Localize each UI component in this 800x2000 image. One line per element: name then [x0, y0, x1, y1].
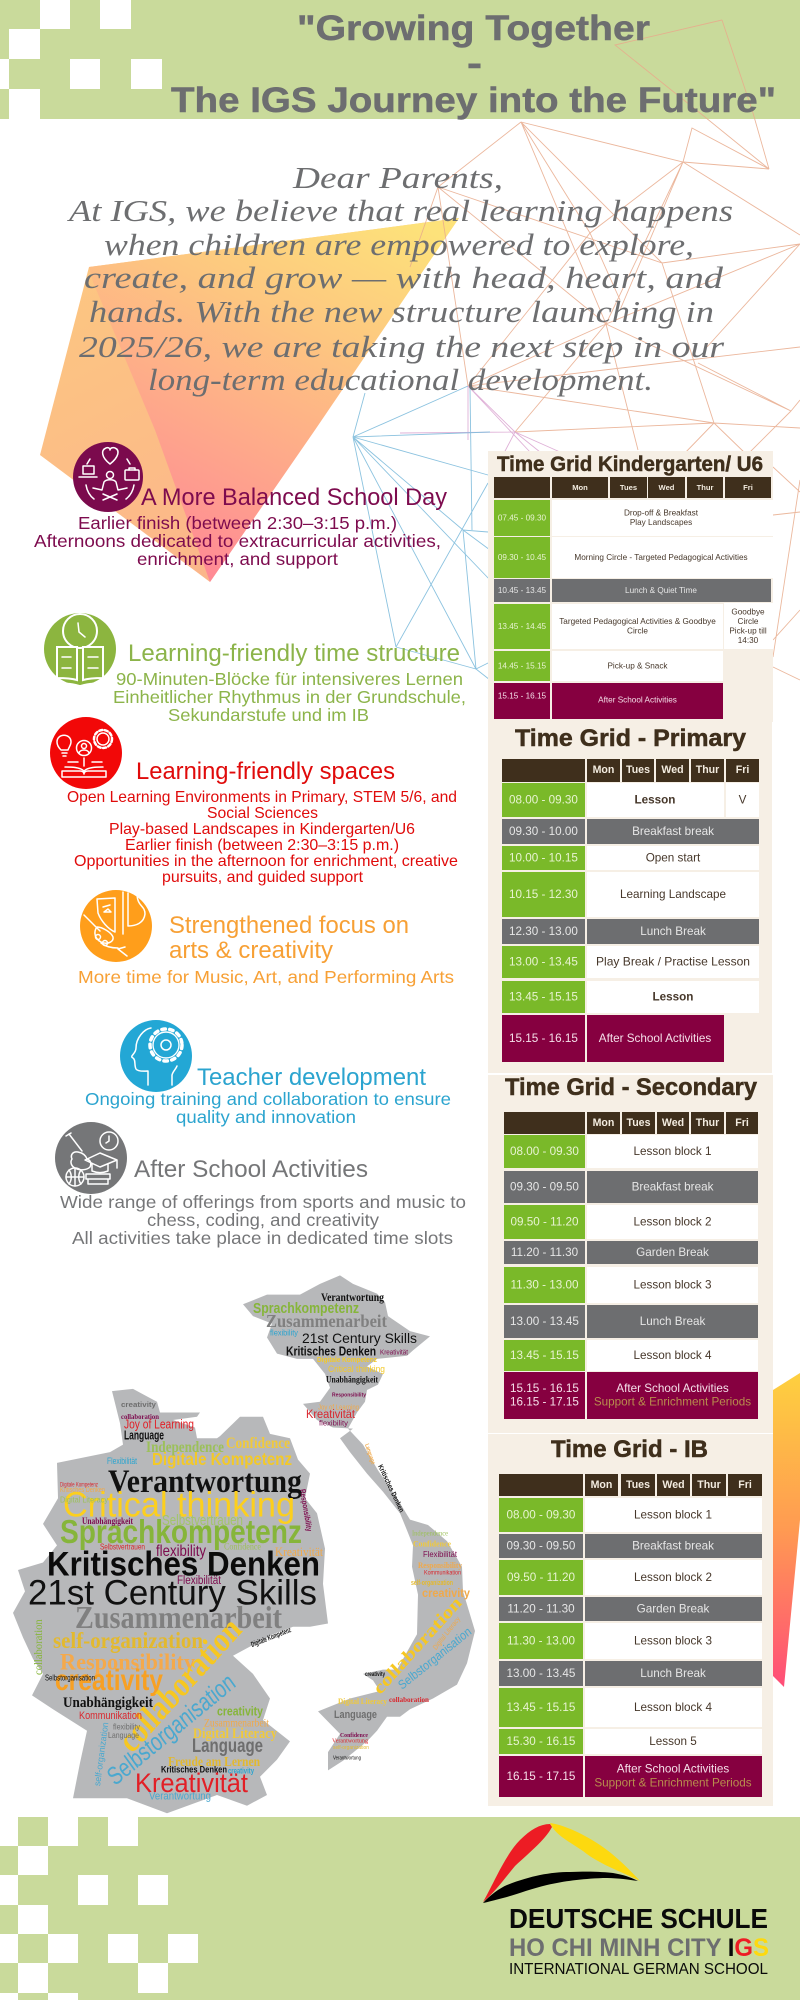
row morning circle: 09.30 - 10.45 [498, 553, 547, 562]
row after school: 15.15 - 16.15 [510, 1382, 579, 1395]
word cloud texts: Digitale Kompetenz [250, 1625, 292, 1649]
word cloud texts: Digitale Kompetenz [60, 1481, 98, 1488]
letter to parents: long-term educational development. [148, 362, 653, 397]
row lesson block 4 [499, 1688, 762, 1727]
word cloud texts: creativity [121, 1400, 156, 1409]
letter to parents: At IGS, we believe that real learning happens [67, 193, 733, 228]
section: teacher development [85, 1020, 451, 1127]
word cloud texts: Unabhängigkeit [63, 1695, 153, 1711]
word cloud texts: collaboration [112, 1610, 249, 1760]
header row: Mon [593, 764, 614, 776]
row lesson block 3: 11.30 - 13.00 [510, 1278, 579, 1292]
letter to parents [67, 160, 733, 397]
row garden break [504, 1241, 758, 1264]
word cloud texts: self-organization [411, 1578, 453, 1587]
row lesson block 2: Lesson block 2 [634, 1216, 711, 1228]
word cloud texts: Digital Literacy [60, 1494, 109, 1505]
word cloud texts: Flexibilität [177, 1575, 222, 1587]
panel: time grid kindergarten [488, 451, 773, 722]
body text: pursuits, and guided support [162, 869, 364, 886]
row targeted activities: 14:30 [738, 636, 759, 645]
row after school: After School Activities [599, 1032, 711, 1045]
heading: After School Activities [134, 1156, 368, 1183]
word cloud texts: Selbstvertrauen [162, 1513, 243, 1529]
row open start [502, 846, 759, 870]
row pick-up: Pick-up & Snack [607, 662, 668, 670]
letter to parents: Dear Parents, [292, 160, 503, 195]
row lunch: Lunch Break [640, 925, 706, 938]
word cloud texts: Zusammenarbeit [266, 1310, 387, 1331]
row lesson afternoon: 13.45 - 15.15 [509, 990, 578, 1004]
row lesson block 4: 13.45 - 15.15 [510, 1349, 579, 1362]
row lesson block 4: Lesson block 4 [634, 1349, 712, 1362]
word cloud texts: collaboration [389, 1696, 429, 1704]
row lesson block 1 [504, 1135, 758, 1168]
row breakfast: Breakfast break [632, 1180, 714, 1194]
header row: Thur [697, 1479, 721, 1491]
body text: quality and innovation [176, 1107, 356, 1127]
logo text [509, 1903, 769, 1978]
body text: enrichment, and support [137, 549, 338, 569]
row lesson block 2 [499, 1560, 762, 1595]
word cloud texts: Selbstorganisation [102, 1668, 241, 1791]
body text: Afternoons dedicated to extracurricular activities, [34, 531, 441, 551]
row pick-up [494, 651, 723, 681]
body text [85, 1089, 451, 1127]
row lesson block 3: Lesson block 3 [634, 1278, 711, 1292]
row open start: 10.00 - 10.15 [509, 852, 578, 864]
header row [499, 1474, 762, 1496]
header row: Wed [659, 483, 675, 492]
body text [34, 513, 441, 569]
heading: Learning-friendly spaces [136, 758, 395, 785]
icon: mask, palette, violin [80, 890, 152, 962]
word cloud texts: 21st Century Skills [28, 1573, 317, 1613]
section: arts and creativity [78, 890, 454, 987]
header row: Tues [620, 483, 637, 492]
word cloud texts: Language [108, 1730, 139, 1740]
decorative gradient polygon right [773, 1373, 800, 1687]
word cloud texts: Responsibility [332, 1392, 367, 1398]
word cloud texts [253, 1292, 474, 1762]
row lesson: V [739, 794, 747, 806]
row open start: Open start [646, 852, 701, 864]
header row: Tues [627, 1117, 651, 1129]
row targeted activities: 13.45 - 14.45 [498, 622, 547, 631]
panel: time grid primary [488, 722, 772, 1073]
footer banner with checker pattern [0, 1817, 800, 2000]
row pick-up: 14.45 - 15.15 [498, 662, 547, 670]
row learning landscape: 10.15 - 12.30 [509, 888, 578, 901]
icon: balance person [73, 442, 143, 512]
header row: Mon [591, 1479, 612, 1491]
word cloud texts: Responsibility [418, 1561, 463, 1570]
word cloud texts: Unabhängigkeit [326, 1375, 379, 1386]
row drop-off: 07.45 - 09.30 [498, 514, 547, 522]
body text: Ongoing training and collaboration to ensure [85, 1089, 451, 1109]
row lesson afternoon [502, 981, 759, 1013]
row morning circle [494, 537, 773, 578]
word cloud texts: Confidence [226, 1434, 290, 1452]
heading: Time Grid Kindergarten/ U6 [497, 453, 763, 476]
header row: Mon [572, 483, 588, 492]
word cloud texts: Unabhängigkeit [82, 1517, 134, 1527]
row lunch: 13.00 - 13.45 [507, 1667, 576, 1680]
row lunch: Lunch & Quiet Time [625, 586, 697, 595]
word cloud texts: Independence [412, 1530, 448, 1538]
body text [113, 669, 466, 725]
header row: Fri [735, 1117, 749, 1129]
header row [504, 1112, 758, 1134]
word cloud texts: Verantwortung [321, 1292, 384, 1304]
row targeted activities: Circle [738, 617, 759, 626]
letter to parents: create, and grow — with head, heart, and [84, 260, 724, 295]
title: "Growing Together [297, 9, 650, 48]
word cloud texts: creativity [365, 1671, 385, 1678]
body text: chess, coding, and creativity [147, 1210, 379, 1230]
header row: Tues [626, 764, 650, 776]
header row: Wed [662, 1117, 684, 1129]
heading: arts & creativity [169, 937, 333, 964]
row lunch: 10.45 - 13.45 [498, 586, 547, 595]
heading: Teacher development [197, 1064, 426, 1091]
row lesson block 4 [504, 1340, 758, 1371]
header row: Thur [696, 764, 719, 776]
row breakfast: 09.30 - 09.50 [507, 1540, 576, 1552]
row drop-off [494, 500, 773, 536]
row garden break: Garden Break [637, 1602, 710, 1616]
section: learning-friendly spaces [50, 717, 458, 886]
row after school [494, 683, 723, 719]
row targeted activities: Circle [627, 626, 648, 636]
panel: time grid IB [488, 1434, 773, 1806]
body text: Wide range of offerings from sports and music to [60, 1192, 466, 1212]
word cloud texts: Critical thinking [328, 1364, 385, 1374]
word cloud texts: Independence [146, 1439, 224, 1456]
word cloud texts: Sprachkompetenz [253, 1300, 359, 1317]
word cloud texts: creativity [55, 1664, 163, 1697]
word cloud texts: Sprachkompetenz [60, 1513, 302, 1550]
header row: Fri [738, 1479, 752, 1491]
word cloud texts: Zusammenarbeit [204, 1717, 270, 1730]
row morning circle: Morning Circle - Targeted Pedagogical Activities [574, 553, 748, 562]
word cloud texts: Kommunikation [79, 1711, 142, 1722]
word cloud texts: Verantwortung [333, 1755, 361, 1762]
word cloud texts: Kritisches Denken [161, 1764, 227, 1775]
row lesson block 3: 11.30 - 13.00 [507, 1634, 576, 1648]
row lesson block 3: Lesson block 3 [634, 1634, 712, 1648]
word cloud texts: Verantwortung [332, 1737, 368, 1745]
row after school: After School Activities [617, 1762, 729, 1776]
row lesson block 2: 09.50 - 11.20 [510, 1216, 579, 1228]
word cloud texts: collaboration [369, 1592, 466, 1698]
icon: guitar, clock, cap, ball [55, 1122, 127, 1194]
row breakfast [504, 1171, 758, 1203]
header row: Tues [626, 1479, 650, 1491]
row play break: 13.00 - 13.45 [509, 956, 578, 968]
body text: More time for Music, Art, and Performing Arts [78, 967, 454, 987]
word cloud texts: Selbstorganisation [45, 1672, 95, 1682]
header row: Fri [736, 764, 749, 776]
row targeted activities [494, 603, 773, 649]
section: learning-friendly time structure [44, 613, 466, 725]
row breakfast: Breakfast break [632, 825, 714, 838]
title [171, 9, 776, 120]
row drop-off: Play Landscapes [630, 518, 692, 527]
word cloud map: Vietnam [243, 1275, 475, 1770]
word cloud texts: Kreativität [306, 1409, 356, 1421]
word cloud texts: Flexibilität [107, 1456, 137, 1466]
row after school: 15.15 - 16.15 [498, 692, 547, 700]
word cloud texts: self-organization [333, 1745, 369, 1751]
word cloud texts: creativity [228, 1765, 254, 1776]
icon: head with gear [120, 1020, 192, 1092]
section: a more balanced school day [34, 442, 447, 569]
header row: Thur [697, 483, 713, 492]
row lesson block 1: Lesson block 1 [634, 1145, 711, 1158]
row learning landscape [502, 872, 759, 917]
heading: A More Balanced School Day [141, 484, 447, 511]
title: The IGS Journey into the Future" [171, 81, 776, 120]
word cloud map: Germany [13, 1389, 328, 1813]
word cloud texts: Joy of Learning [318, 1402, 359, 1411]
header row [502, 759, 759, 782]
word cloud texts: Joy of Learning [124, 1417, 194, 1432]
word cloud texts: Kritisches Denken [47, 1545, 320, 1584]
row lesson block 1: Lesson block 1 [634, 1508, 712, 1522]
word cloud texts: Digital Literacy [431, 1614, 462, 1652]
word cloud texts: Kommunikation [424, 1569, 461, 1576]
word cloud texts: Kritisches Denken [60, 1485, 105, 1494]
word cloud texts: flexibility [156, 1543, 206, 1560]
row after school: Support & Enrichment Periods [594, 1776, 752, 1790]
row play break: Play Break / Practise Lesson [596, 956, 750, 968]
header row: Mon [593, 1117, 614, 1129]
row lunch: 13.00 - 13.45 [510, 1315, 579, 1328]
row breakfast [499, 1534, 762, 1558]
word cloud texts: Digital Literacy [193, 1726, 278, 1742]
icon: ideas and book [50, 717, 122, 789]
word cloud texts: Kritisches Denken [376, 1463, 406, 1514]
row lesson: 08.00 - 09.30 [509, 794, 578, 806]
header row: Fri [743, 483, 753, 492]
row garden break [499, 1597, 762, 1621]
icon: clock and book [44, 613, 116, 686]
row breakfast [502, 819, 759, 844]
row lunch: 12.30 - 13.00 [509, 925, 578, 938]
row breakfast: Breakfast break [632, 1540, 714, 1552]
word cloud texts: Selbstorganisation [396, 1624, 474, 1692]
word cloud texts: self-organization [92, 1722, 110, 1787]
row drop-off: Drop-off & Breakfast [624, 508, 699, 518]
word cloud texts [28, 1400, 323, 1802]
word cloud texts: Kreativität [380, 1347, 408, 1357]
word cloud texts: Selbstvertrauen [100, 1541, 145, 1552]
row garden break: Garden Break [636, 1246, 709, 1259]
row lesson 5 [499, 1729, 762, 1754]
word cloud texts: Language [334, 1710, 377, 1721]
school logo [483, 1823, 769, 1978]
word cloud texts: Responsibility [60, 1649, 196, 1675]
panel: time grid secondary [488, 1074, 773, 1433]
row lunch: Lunch Break [640, 1667, 706, 1680]
body text: Einheitlicher Rhythmus in der Grundschule, [113, 687, 466, 707]
row lunch [499, 1661, 762, 1686]
letter to parents: 2025/26, we are taking the next step in our [79, 329, 725, 364]
row lunch [504, 1305, 758, 1338]
word cloud texts: Flexibilität [423, 1549, 458, 1559]
row garden break: 11.20 - 11.30 [507, 1602, 575, 1616]
row lesson block 2: 09.50 - 11.20 [507, 1571, 576, 1584]
row breakfast: 09.30 - 09.50 [510, 1180, 579, 1194]
body text: Opportunities in the afternoon for enrichment, creative [74, 853, 458, 870]
row after school: Support & Enrichment Periods [594, 1396, 751, 1408]
body text: Social Sciences [207, 805, 318, 822]
row after school [504, 1372, 758, 1419]
word cloud texts: flexibility [319, 1418, 348, 1427]
word cloud texts: Confidence [413, 1539, 451, 1548]
word cloud texts: Digitale Kompetenz [152, 1449, 292, 1469]
row lunch: Lunch Break [640, 1315, 705, 1328]
geometric network lines [353, 20, 800, 680]
row targeted activities: Targeted Pedagogical Activities & Goodbye [559, 617, 716, 626]
header row [494, 477, 771, 498]
body text: Sekundarstufe und im IB [168, 705, 369, 725]
row after school: 16.15 - 17.15 [510, 1396, 579, 1408]
word cloud texts: Responsibility [298, 1488, 315, 1532]
row lesson block 3 [499, 1623, 762, 1659]
title: - [467, 44, 482, 83]
word cloud texts: Language [124, 1428, 164, 1442]
letter to parents: hands. With the new structure launching in [89, 294, 714, 329]
heading: Time Grid - Primary [515, 725, 747, 752]
header row: Thur [696, 1117, 719, 1129]
logo text: HO CHI MINH CITY IGS [509, 1934, 769, 1962]
row lesson block 1: 08.00 - 09.30 [510, 1145, 579, 1158]
row lesson: Lesson [635, 794, 675, 806]
heading: Time Grid - Secondary [505, 1074, 758, 1101]
body text: Open Learning Environments in Primary, STEM 5/6, and [67, 789, 457, 806]
row after school: After School Activities [598, 696, 677, 704]
word cloud texts: Kritisches Denken [286, 1344, 376, 1359]
heading: Time Grid - IB [551, 1436, 708, 1463]
icon: logo triangle [483, 1823, 640, 1903]
heading [169, 912, 409, 964]
row lesson afternoon: Lesson [653, 990, 693, 1004]
heading: Learning-friendly time structure [128, 640, 460, 667]
word cloud texts: flexibility [270, 1327, 299, 1337]
body text [60, 1192, 466, 1248]
word cloud texts: Digitale Kompetenz [317, 1355, 377, 1364]
word cloud texts: Freude am Lernen [168, 1754, 260, 1769]
row lesson 5: 15.30 - 16.15 [507, 1735, 576, 1748]
word cloud texts: collaboration [121, 1413, 159, 1421]
row lesson block 1: 08.00 - 09.30 [507, 1508, 576, 1522]
body text [67, 789, 458, 886]
row after school: 16.15 - 17.15 [507, 1770, 576, 1783]
word cloud texts: flexibility [113, 1721, 141, 1732]
body text: Play-based Landscapes in Kindergarten/U6 [109, 821, 415, 838]
row lunch [502, 919, 759, 944]
logo text: INTERNATIONAL GERMAN SCHOOL [509, 1961, 768, 1978]
row breakfast: 09.30 - 10.00 [509, 825, 578, 838]
logo text: DEUTSCHE SCHULE [509, 1903, 768, 1934]
row lesson block 1 [499, 1498, 762, 1532]
row play break [502, 946, 759, 978]
top banner with checker pattern [0, 0, 800, 119]
word cloud texts: Verantwortung [108, 1462, 302, 1499]
row garden break: 11.20 - 11.30 [511, 1246, 579, 1259]
word cloud texts: Language [192, 1735, 263, 1756]
row lunch [494, 579, 771, 602]
row after school: 15.15 - 16.15 [509, 1032, 578, 1045]
row after school [502, 1015, 724, 1062]
row lesson block 3 [504, 1267, 758, 1303]
row targeted activities: Goodbye [731, 608, 765, 616]
word cloud texts: Kreativität [135, 1769, 248, 1798]
row lesson block 2 [504, 1205, 758, 1239]
row lesson block 2: Lesson block 2 [634, 1571, 712, 1584]
word cloud texts: Zusammenarbeit [75, 1599, 283, 1635]
body text: All activities take place in dedicated time slots [72, 1228, 453, 1248]
word cloud texts: Confidence [224, 1541, 261, 1553]
body text: Earlier finish (between 2:30–3:15 p.m.) [125, 837, 399, 854]
word cloud texts: Critical thinking [63, 1485, 295, 1525]
word cloud texts: Digital Literacy [338, 1697, 388, 1706]
word cloud texts: collaboration [31, 1619, 45, 1675]
word cloud texts: Verantwortung [149, 1791, 211, 1802]
body text: 90-Minuten-Blöcke für intensiveres Lernen [116, 669, 463, 689]
decorative gradient polygon left [40, 218, 459, 582]
word cloud texts: Confidence [340, 1732, 368, 1739]
letter to parents: when children are empowered to explore, [104, 227, 694, 262]
body text: Earlier finish (between 2:30–3:15 p.m.) [78, 513, 397, 533]
row targeted activities: Pick-up till [729, 626, 767, 636]
row lesson block 4: 13.45 - 15.15 [507, 1701, 576, 1714]
word cloud texts: creativity [217, 1704, 263, 1719]
header row: Wed [661, 764, 684, 776]
word cloud texts: creativity [422, 1587, 471, 1600]
word cloud texts: self-organization [53, 1628, 203, 1653]
word cloud texts: Language [363, 1443, 377, 1466]
row learning landscape: Learning Landscape [620, 888, 726, 901]
section: after school activities [55, 1122, 466, 1248]
row lesson [502, 783, 759, 817]
header row: Wed [662, 1479, 685, 1491]
word cloud texts: Kreativität [275, 1545, 323, 1559]
row after school [499, 1756, 762, 1797]
row lesson 5: Lesson 5 [649, 1735, 697, 1748]
row lesson block 4: Lesson block 4 [634, 1701, 712, 1714]
word cloud texts: 21st Century Skills [302, 1330, 417, 1346]
heading: Strengthened focus on [169, 912, 409, 939]
row after school: After School Activities [616, 1382, 729, 1395]
